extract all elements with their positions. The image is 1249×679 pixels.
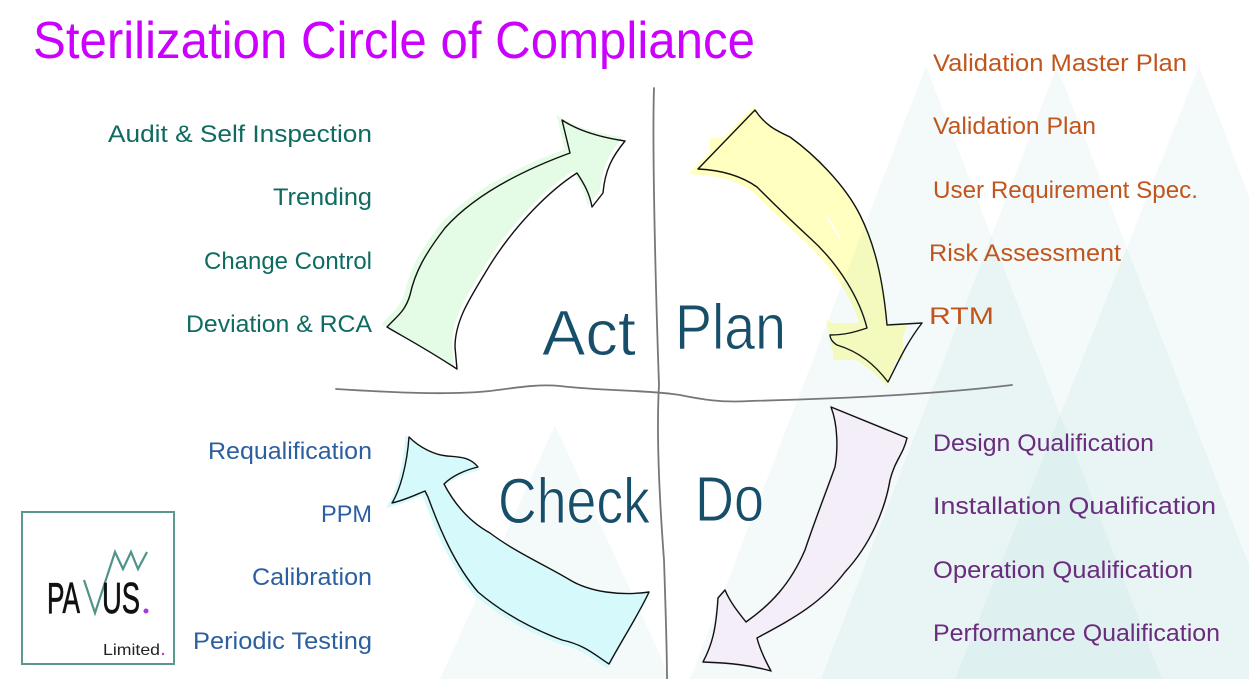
quadrant label: Plan: Plan	[675, 291, 786, 363]
logo: Pavus Limited: US	[102, 574, 140, 623]
list: Act items: Deviation & RCA	[186, 311, 372, 338]
list: Do items	[933, 430, 1220, 647]
list: Plan items: Validation Master Plan	[933, 50, 1187, 77]
arrow: Check (cyan)	[390, 437, 649, 666]
list: Check items	[193, 438, 372, 655]
list: Act items	[108, 121, 372, 338]
quadrant label: Do: Do	[695, 463, 764, 535]
list: Act items: Change Control	[204, 248, 372, 275]
background triangles	[440, 66, 1249, 679]
title: Sterilization Circle of Compliance	[33, 12, 755, 70]
logo: Pavus Limited: PA	[47, 574, 80, 623]
arrow: Plan (yellow)	[696, 110, 922, 382]
highlight streak	[826, 215, 840, 238]
arrow: Act (green)	[383, 117, 625, 369]
arrow: Do (lilac)	[703, 407, 907, 671]
quadrant label: Act: Act	[542, 297, 636, 369]
list: Check items: Periodic Testing	[193, 628, 372, 655]
list: Plan items: Risk Assessment	[929, 240, 1121, 267]
list: Plan items: User Requirement Spec.	[933, 177, 1198, 204]
list: Plan items	[929, 50, 1198, 330]
list: Check items: Requalification	[208, 438, 372, 465]
list: Check items: Calibration	[252, 564, 372, 591]
logo: Pavus Limited: Limited	[103, 642, 160, 659]
quadrant label: Check: Check	[498, 465, 651, 537]
logo: Pavus Limited	[22, 512, 174, 664]
list: Do items: Design Qualification	[933, 430, 1154, 457]
list: Act items: Trending	[273, 184, 372, 211]
quadrant axes	[336, 88, 1012, 679]
list: Do items: Performance Qualification	[933, 620, 1220, 647]
list: Do items: Operation Qualification	[933, 557, 1193, 584]
list: Do items: Installation Qualification	[933, 493, 1216, 520]
list: Plan items: Validation Plan	[933, 113, 1096, 140]
list: Plan items: RTM	[929, 303, 994, 330]
list: Check items: PPM	[321, 501, 372, 528]
list: Act items: Audit & Self Inspection	[108, 121, 372, 148]
